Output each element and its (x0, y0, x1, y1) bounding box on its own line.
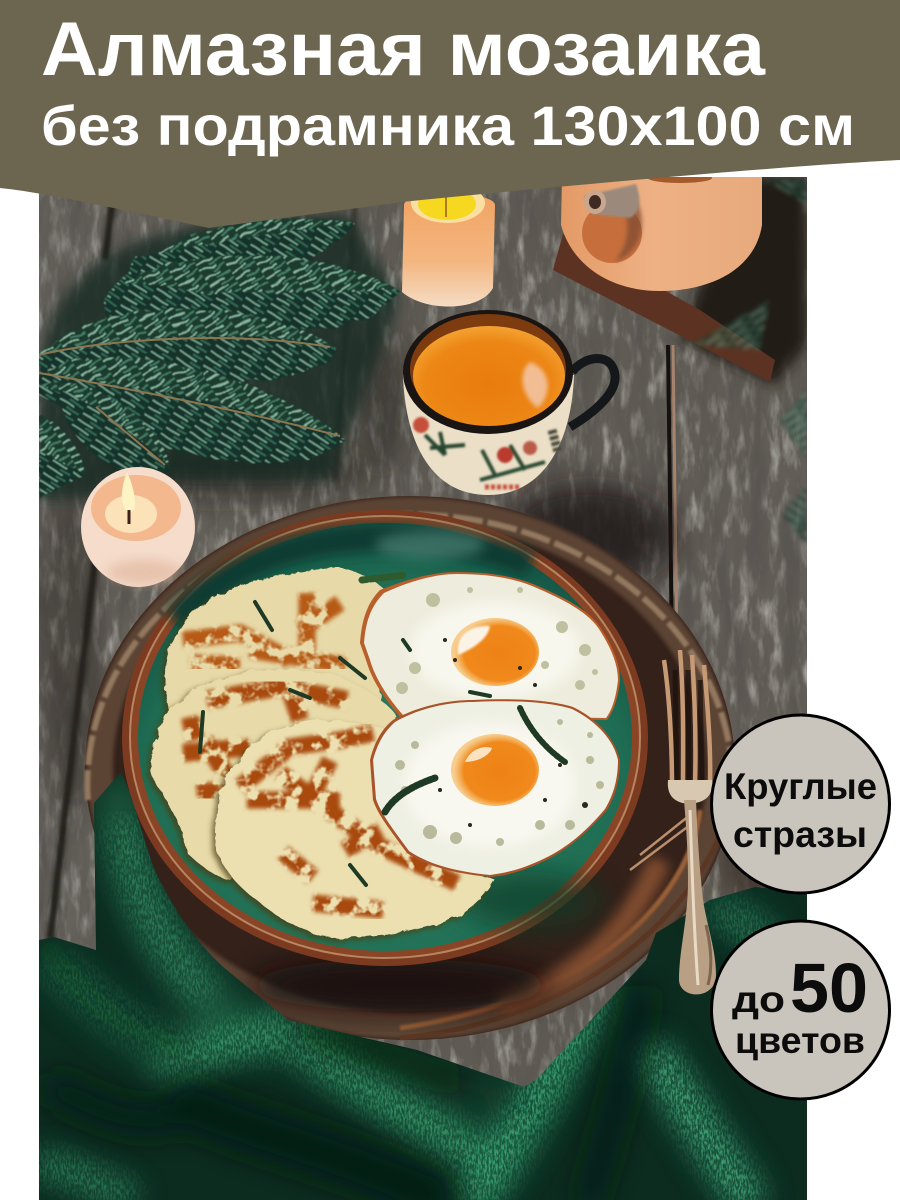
velvet smooth sheen (45, 800, 790, 1195)
fried egg top (360, 572, 620, 720)
pancake front (215, 720, 495, 938)
cup of tea (403, 310, 615, 495)
bronze tray (85, 496, 735, 1040)
teapot board (553, 234, 775, 382)
subtitle: без подрамника 130х100 см (41, 94, 855, 157)
badge: up to 50 colours: цветов (735, 1020, 865, 1061)
fried egg bottom (370, 638, 620, 877)
photo: breakfast on a wooden table (39, 173, 807, 1200)
badge: up to 50 colours: 50 (790, 949, 868, 1027)
badge: round rhinestones: Круглые (724, 766, 877, 807)
velvet speckled highlights (45, 830, 790, 1195)
pancake back (165, 568, 385, 712)
title: Алмазная мозаика (41, 7, 766, 92)
pine branch shadow (39, 215, 400, 500)
cup floral pattern (413, 417, 558, 487)
thyme sprigs (200, 575, 565, 885)
pine sprigs on the right (690, 180, 807, 545)
green plate (122, 510, 648, 966)
potato pancakes (150, 568, 495, 938)
pancake middle (150, 669, 397, 880)
fork (664, 650, 716, 994)
green velvet cloth (39, 770, 807, 1200)
badge: round rhinestones (712, 715, 890, 893)
badge: up to 50 colours (712, 921, 890, 1099)
pine stems (39, 338, 340, 465)
header banner (0, 0, 900, 228)
badge: round rhinestones: стразы (733, 814, 867, 855)
candle top (402, 183, 495, 307)
small round candle (81, 467, 195, 587)
teapot (561, 173, 762, 291)
pine branches (39, 218, 399, 498)
badge: up to 50 colours: до (732, 979, 785, 1020)
dark corner behind the teapot (680, 177, 807, 385)
velvet dark folds (45, 945, 640, 1195)
wooden table (39, 177, 807, 1087)
